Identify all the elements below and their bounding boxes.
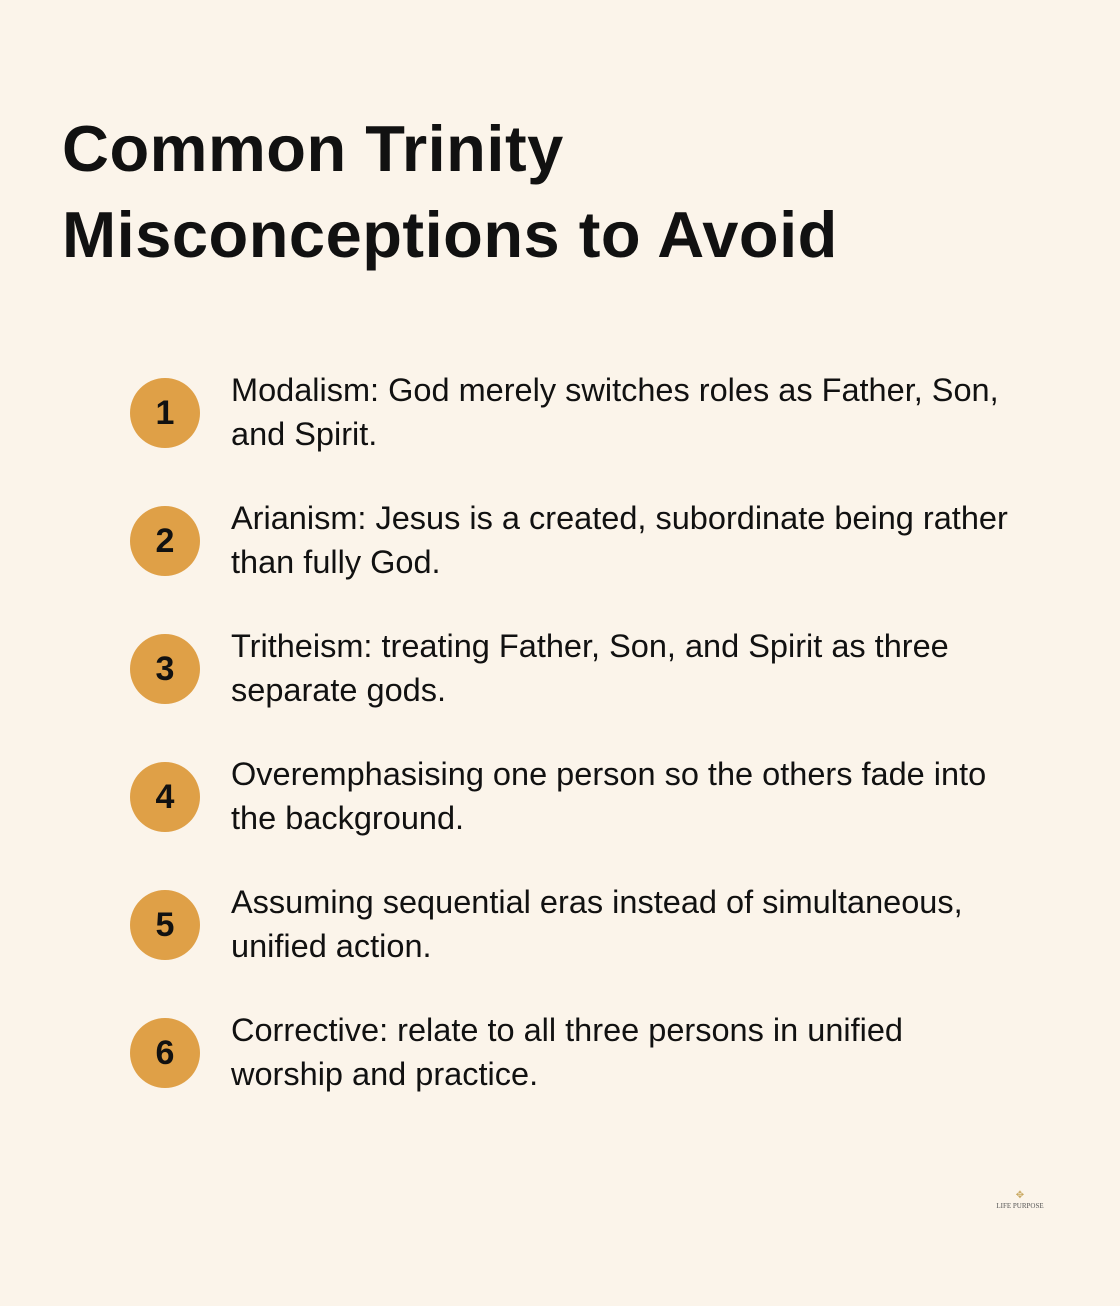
item 5: unified action. (231, 928, 432, 964)
item 4: the background. (231, 800, 464, 836)
item 3: Tritheism: treating Father, Son, and Spirit as three (231, 628, 949, 664)
logo: LIFE PURPOSE (996, 1202, 1044, 1210)
item 3: separate gods. (231, 672, 446, 708)
title: Misconceptions to Avoid (62, 198, 838, 271)
item 6 (130, 1012, 903, 1092)
item 3: 3 (156, 650, 174, 688)
item 6: Corrective: relate to all three persons in unified (231, 1012, 903, 1048)
item 6: 6 (156, 1034, 174, 1072)
item 1: Modalism: God merely switches roles as Father, Son, (231, 372, 999, 408)
item 2: Arianism: Jesus is a created, subordinate being rather (231, 500, 1008, 536)
logo (996, 1190, 1044, 1210)
item 6: worship and practice. (231, 1056, 538, 1092)
item 2: 2 (156, 522, 174, 560)
item 1: and Spirit. (231, 416, 377, 452)
item 3 (130, 628, 949, 708)
item 5: 5 (156, 906, 174, 944)
item 1: 1 (156, 394, 174, 432)
item 2: than fully God. (231, 544, 441, 580)
item 1 (130, 372, 999, 452)
item 4: Overemphasising one person so the others fade into (231, 756, 986, 792)
item 5 (130, 884, 963, 964)
item 4: 4 (156, 778, 174, 816)
item 4 (130, 756, 986, 836)
item 5: Assuming sequential eras instead of simultaneous, (231, 884, 963, 920)
logo: ✥ (1016, 1190, 1024, 1201)
item 2 (130, 500, 1008, 580)
title: Common Trinity (62, 112, 564, 185)
title (62, 112, 838, 271)
